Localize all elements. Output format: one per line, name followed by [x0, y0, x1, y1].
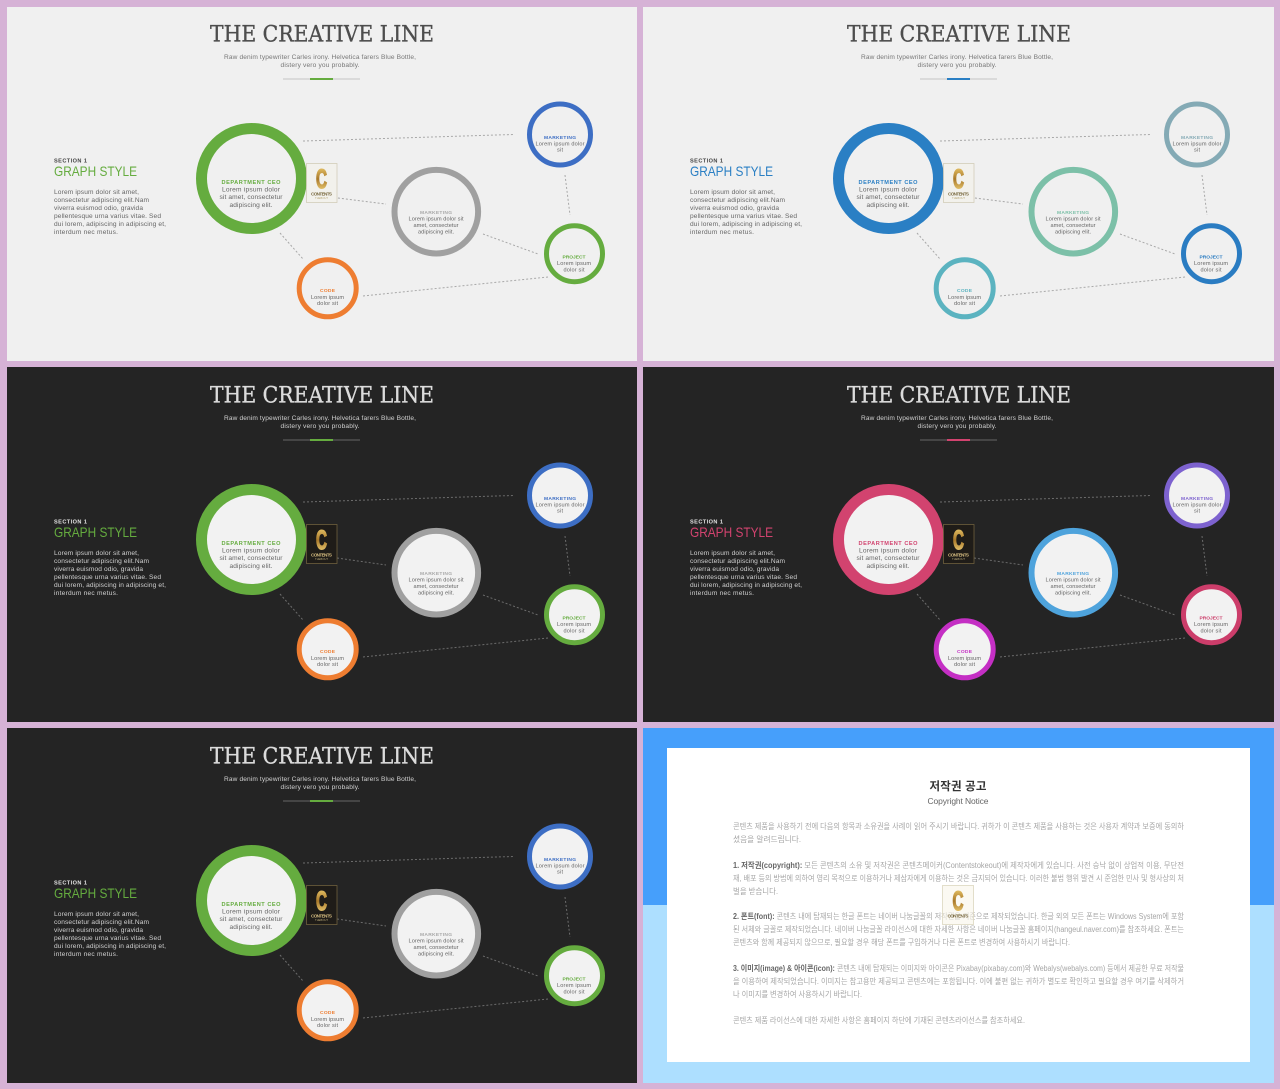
node: department ceo [202, 490, 302, 590]
panel: second dark slide with green theme [7, 728, 637, 1083]
node: department ceo: Lorem ipsum dolor [222, 908, 281, 916]
node: marketing center [1032, 531, 1115, 614]
section text block: interdum nec metus. [54, 590, 118, 597]
panel: dark slide with pink theme [643, 367, 1274, 722]
section text block: consectetur adipiscing elit.Nam [54, 197, 150, 204]
dashed connector lines [917, 134, 1207, 296]
logo badge: THEBOUT [315, 918, 328, 922]
node: marketing top: Lorem ipsum dolor [536, 864, 585, 870]
panel: dark slide with green theme [7, 367, 637, 722]
notice body text [733, 821, 1185, 1025]
node: department ceo: adipiscing elit. [230, 563, 273, 570]
node: project [1184, 587, 1240, 643]
node: marketing center: MARKETING [420, 571, 452, 577]
node: marketing center: Lorem ipsum dolor sit [1046, 578, 1101, 584]
node: marketing top: MARKETING [544, 496, 576, 502]
notice body text: 나 이미지를 변경하여 사용하시기 바랍니다. [733, 989, 862, 999]
logo badge: CONTENTS [311, 914, 332, 918]
node: marketing top: Lorem ipsum dolor [536, 502, 585, 508]
section text block: interdum nec metus. [690, 229, 754, 236]
subtitle [861, 415, 1053, 430]
section text block: SECTION 1 [54, 520, 87, 526]
node: code: Lorem ipsum [311, 295, 344, 301]
logo badge [306, 524, 337, 564]
node: project: dolor sit [564, 628, 585, 634]
title divider [920, 439, 997, 441]
section text block: consectetur adipiscing elit.Nam [690, 558, 786, 565]
node: code: CODE [320, 288, 336, 294]
node: department ceo: Lorem ipsum dolor [222, 548, 281, 554]
node: project: Lorem ipsum [557, 622, 591, 628]
node: marketing center: Lorem ipsum dolor sit [408, 578, 464, 584]
section text block: interdum nec metus. [690, 590, 754, 597]
subtitle: Raw denim typewriter Carles irony. Helvetica farers Blue Bottle, [861, 415, 1053, 422]
logo watermark: C [952, 886, 964, 916]
node: marketing center: amet, consectetur [1050, 584, 1096, 590]
node: code: CODE [320, 1010, 336, 1016]
notice body text: 콘텐츠 제품 라이선스에 대한 자세한 사항은 홈페이지 하단에 기재된 콘텐츠라이선스를 참조하세요. [733, 1015, 1025, 1025]
node: project: dolor sit [564, 268, 585, 274]
node: marketing center [394, 531, 478, 614]
section text block: SECTION 1 [54, 880, 87, 886]
node: code [299, 260, 356, 317]
section text block: pellentesque urna varius vitae. Sed [690, 574, 797, 581]
node: marketing center: Lorem ipsum dolor sit [1046, 216, 1101, 222]
notice body text: 3. 이미지(image) & 아이콘(icon): 콘텐츠 내에 탑재되는 이미지와 아이콘은 Pixabay(pixabay.com)와 Webalys(webalys.com) 등에서 제공한 무료 저작물 [733, 963, 1184, 973]
node: code: dolor sit [954, 662, 975, 668]
notice body text: 재, 배포 등의 방법에 의하여 영리 목적으로 이용하거나 제삼자에게 이용하는 것은 금지되어 있습니다. 이러한 불법 행위 발견 시 준엄한 민사 및 형사상의 처 [733, 873, 1184, 883]
logo badge: CONTENTS [948, 192, 969, 196]
section text block: viverra euismod odio, gravida [54, 566, 143, 573]
subtitle: distery vero you probably. [280, 62, 360, 69]
node: project: Lorem ipsum [557, 261, 591, 267]
node: marketing center: adipiscing elit. [418, 230, 454, 236]
node: project: Lorem ipsum [1194, 261, 1228, 267]
node: code [936, 621, 993, 678]
section text block [54, 520, 166, 597]
node: department ceo: adipiscing elit. [866, 202, 910, 209]
logo badge: C [953, 164, 964, 194]
section text block: GRAPH STYLE [54, 885, 137, 901]
subtitle: distery vero you probably. [918, 62, 997, 69]
node: marketing top [1166, 104, 1228, 165]
notice body text: 콘텐츠 제품을 사용하기 전에 다음의 항목과 소유권을 사례이 읽어 주시기 바랍니다. 귀하가 이 콘텐츠 제품을 사용하는 것은 사용자 계약과 보증에 동의하 [733, 821, 1185, 831]
node: department ceo: sit amet, consectetur [856, 194, 920, 201]
title: THE CREATIVE LINE [210, 744, 434, 770]
node: marketing center [394, 892, 478, 976]
section text block: viverra euismod odio, gravida [54, 205, 143, 212]
logo badge [944, 164, 974, 202]
node: marketing center: adipiscing elit. [1055, 230, 1091, 236]
section text block: consectetur adipiscing elit.Nam [54, 558, 150, 565]
dashed connector lines [280, 134, 570, 296]
node: project: PROJECT [1200, 616, 1222, 622]
node: department ceo: DEPARTMENT CEO [858, 180, 918, 186]
logo badge: THEBOUT [952, 196, 965, 200]
title divider [283, 78, 360, 80]
section text block: consectetur adipiscing elit.Nam [690, 197, 786, 204]
node: department ceo: Lorem ipsum dolor [859, 548, 918, 554]
panel: light slide with green theme [7, 7, 637, 361]
node: project [546, 587, 602, 643]
node: marketing top: Lorem ipsum dolor [1172, 502, 1222, 508]
title: THE CREATIVE LINE [210, 22, 434, 48]
node: department ceo: adipiscing elit. [230, 924, 273, 931]
section text block: viverra euismod odio, gravida [690, 205, 779, 212]
section text block: Lorem ipsum dolor sit amet, [690, 189, 775, 196]
node: marketing top [1166, 465, 1228, 526]
section text block: SECTION 1 [54, 158, 87, 164]
node: marketing center [1032, 170, 1115, 254]
logo badge: THEBOUT [315, 557, 328, 561]
logo badge: THEBOUT [315, 196, 328, 200]
node: department ceo [838, 128, 938, 228]
title divider [920, 78, 997, 80]
subtitle: distery vero you probably. [280, 784, 360, 791]
node: marketing top: sit [557, 148, 563, 154]
node: marketing top [530, 104, 590, 165]
section text block: GRAPH STYLE [690, 524, 773, 540]
section text block [54, 880, 166, 958]
node: marketing top: Lorem ipsum dolor [536, 142, 585, 148]
logo watermark: CONTENTS [948, 914, 968, 918]
node: department ceo: DEPARTMENT CEO [222, 180, 281, 186]
subtitle [224, 415, 416, 430]
node: code: dolor sit [954, 301, 975, 307]
logo badge: C [316, 886, 327, 916]
node: marketing top: sit [557, 508, 563, 514]
node: project: dolor sit [1200, 268, 1222, 274]
node: marketing center: amet, consectetur [414, 945, 459, 951]
section text block: Lorem ipsum dolor sit amet, [54, 911, 139, 918]
node: code [936, 260, 993, 317]
node: code [299, 982, 356, 1039]
node: department ceo: adipiscing elit. [866, 563, 910, 570]
logo badge: C [316, 164, 327, 194]
notice body text: 된 서체와 글꼴로 제작되었습니다. 네이버 나눔글꼴 라이선스에 대한 자세한 사항은 네이버 나눔글꼴 홈페이지(hangeul.naver.com)를 참조하세요. 폰트는 [733, 924, 1184, 934]
node: code: Lorem ipsum [311, 1017, 344, 1023]
section text block: dui lorem, adipiscing in adipiscing et, [54, 943, 166, 950]
section text block: viverra euismod odio, gravida [690, 566, 779, 573]
node: code: dolor sit [317, 1023, 338, 1029]
node: marketing top [530, 465, 590, 526]
node: marketing top: sit [1194, 148, 1200, 154]
node: department ceo: sit amet, consectetur [220, 194, 283, 201]
logo badge: C [953, 525, 964, 555]
node: project [546, 948, 602, 1004]
notice card [667, 748, 1250, 1062]
logo badge [306, 164, 337, 202]
node: marketing center: MARKETING [420, 210, 452, 216]
node: department ceo: adipiscing elit. [230, 202, 273, 209]
node: project: PROJECT [562, 976, 586, 982]
logo badge: C [316, 525, 327, 555]
section text block: SECTION 1 [690, 520, 723, 526]
section text block: dui lorem, adipiscing in adipiscing et, [690, 582, 802, 589]
node: code: CODE [957, 649, 973, 655]
section text block: GRAPH STYLE [54, 524, 137, 540]
notice body text: 2. 폰트(font): 콘텐츠 내에 탑재되는 한글 폰트는 네이버 나눔글꼴의 저작권을 기준으로 제작되었습니다. 한글 외의 모든 폰트는 Windows System에 포함 [733, 911, 1185, 921]
logo badge: CONTENTS [311, 552, 332, 558]
title: THE CREATIVE LINE [847, 382, 1071, 408]
panel: light slide with blue theme [643, 7, 1274, 361]
node: department ceo [202, 128, 302, 228]
node: code: Lorem ipsum [948, 295, 981, 301]
node: code: CODE [957, 288, 973, 294]
notice body text: 1. 저작권(copyright): 모든 콘텐츠의 소유 및 저작권은 콘텐츠메이커(Contentstokeout)에 제작자에게 있습니다. 사전 승낙 없이 상업적 이용, 무단전 [733, 860, 1184, 870]
node: marketing center: Lorem ipsum dolor sit [408, 938, 464, 944]
section text block: pellentesque urna varius vitae. Sed [690, 213, 797, 220]
node: department ceo: Lorem ipsum dolor [859, 186, 918, 194]
title divider [283, 800, 360, 802]
node: marketing top: sit [1194, 508, 1200, 514]
subtitle: Raw denim typewriter Carles irony. Helvetica farers Blue Bottle, [861, 54, 1053, 61]
node: marketing center: MARKETING [1057, 571, 1089, 577]
notice body text: 벌을 받습니다. [733, 886, 778, 896]
node: marketing top: MARKETING [544, 857, 576, 863]
panel: copyright notice [643, 728, 1274, 1083]
section text block: interdum nec metus. [54, 229, 118, 236]
section text block: GRAPH STYLE [690, 163, 773, 179]
section text block: viverra euismod odio, gravida [54, 927, 143, 934]
node: project: PROJECT [562, 616, 586, 622]
node: marketing center: MARKETING [1057, 210, 1089, 216]
node: marketing top: MARKETING [544, 135, 576, 141]
subtitle: Raw denim typewriter Carles irony. Helvetica farers Blue Bottle, [224, 776, 416, 783]
section text block: Lorem ipsum dolor sit amet, [54, 550, 139, 557]
node: code: Lorem ipsum [311, 656, 344, 662]
node: code: Lorem ipsum [948, 656, 981, 662]
node: department ceo: Lorem ipsum dolor [222, 186, 281, 194]
node: code [299, 621, 356, 678]
logo watermark [942, 886, 974, 924]
node: code: dolor sit [317, 301, 338, 307]
node: project: dolor sit [1200, 628, 1222, 634]
node: marketing top: sit [557, 870, 563, 876]
dashed connector lines [280, 496, 570, 657]
section text block [54, 158, 166, 236]
subtitle [224, 54, 416, 69]
subtitle [224, 776, 416, 791]
node: marketing top: MARKETING [1181, 135, 1213, 141]
node: marketing center: amet, consectetur [414, 223, 459, 229]
node: project: dolor sit [564, 990, 585, 996]
logo badge [306, 886, 337, 924]
section text block: dui lorem, adipiscing in adipiscing et, [54, 221, 166, 228]
node: project: PROJECT [562, 254, 586, 260]
subtitle: Raw denim typewriter Carles irony. Helvetica farers Blue Bottle, [224, 415, 416, 422]
dashed connector lines [280, 856, 570, 1018]
title divider [283, 439, 360, 441]
node: department ceo: DEPARTMENT CEO [222, 902, 281, 908]
node: department ceo: DEPARTMENT CEO [222, 541, 281, 547]
node: marketing top [530, 826, 590, 887]
logo badge: CONTENTS [948, 552, 969, 558]
node: marketing center: adipiscing elit. [418, 952, 454, 958]
node: marketing center: adipiscing elit. [1055, 590, 1091, 596]
logo badge: CONTENTS [311, 192, 332, 196]
section text block: Lorem ipsum dolor sit amet, [54, 189, 139, 196]
node: marketing top: MARKETING [1181, 496, 1213, 502]
subtitle: distery vero you probably. [918, 423, 997, 430]
title: THE CREATIVE LINE [847, 22, 1071, 48]
section text block [690, 158, 802, 236]
section text block: dui lorem, adipiscing in adipiscing et, [690, 221, 802, 228]
node: department ceo: sit amet, consectetur [220, 555, 283, 562]
node: project [546, 226, 602, 282]
logo badge [944, 524, 974, 564]
section text block: consectetur adipiscing elit.Nam [54, 919, 150, 926]
section text block: Lorem ipsum dolor sit amet, [690, 550, 775, 557]
notice heading: Copyright Notice [928, 796, 989, 806]
node: department ceo: DEPARTMENT CEO [858, 541, 918, 547]
node: project: PROJECT [1200, 254, 1222, 260]
notice heading: 저작권 공고 [930, 779, 987, 793]
section text block: GRAPH STYLE [54, 163, 137, 179]
node: code: CODE [320, 649, 336, 655]
notice body text: 콘텐츠와 함께 제공되지 않으므로, 필요할 경우 해당 폰트를 구입하거나 다른 폰트로 변경하여 사용하시기 바랍니다. [733, 937, 1070, 947]
node: marketing center: amet, consectetur [414, 584, 459, 590]
node: marketing top: Lorem ipsum dolor [1172, 142, 1222, 148]
node: department ceo: sit amet, consectetur [220, 916, 283, 923]
node: project: Lorem ipsum [1194, 622, 1228, 628]
section text block: pellentesque urna varius vitae. Sed [54, 935, 161, 942]
node: department ceo: sit amet, consectetur [856, 555, 920, 562]
section text block: SECTION 1 [690, 158, 723, 164]
section text block: pellentesque urna varius vitae. Sed [54, 574, 161, 581]
node: code: dolor sit [317, 662, 338, 668]
notice heading [928, 779, 989, 806]
node: marketing center: MARKETING [420, 932, 452, 938]
subtitle: Raw denim typewriter Carles irony. Helvetica farers Blue Bottle, [224, 54, 416, 61]
node: project [1184, 226, 1240, 282]
node: marketing center [394, 170, 478, 254]
section text block [690, 520, 802, 597]
node: marketing center: amet, consectetur [1050, 223, 1096, 229]
section text block: dui lorem, adipiscing in adipiscing et, [54, 582, 166, 589]
notice body text: 셨음을 알려드립니다. [733, 834, 801, 844]
node: department ceo [838, 490, 938, 590]
node: marketing center: adipiscing elit. [418, 590, 454, 596]
subtitle [861, 54, 1053, 69]
notice body text: 을 이용하여 제작되었습니다. 이미지는 참고용만 제공되고 콘텐츠에는 포함됩니다. 이에 불편 없는 귀하가 별도로 확인하고 필요할 경우 여기를 삭제하거 [733, 976, 1184, 986]
node: department ceo [202, 850, 302, 950]
logo badge: THEBOUT [952, 557, 965, 561]
section text block: interdum nec metus. [54, 951, 118, 958]
section text block: pellentesque urna varius vitae. Sed [54, 213, 161, 220]
subtitle: distery vero you probably. [280, 423, 360, 430]
node: project: Lorem ipsum [557, 983, 591, 989]
title: THE CREATIVE LINE [210, 382, 434, 408]
node: marketing center: Lorem ipsum dolor sit [408, 216, 464, 222]
dashed connector lines [917, 496, 1207, 657]
